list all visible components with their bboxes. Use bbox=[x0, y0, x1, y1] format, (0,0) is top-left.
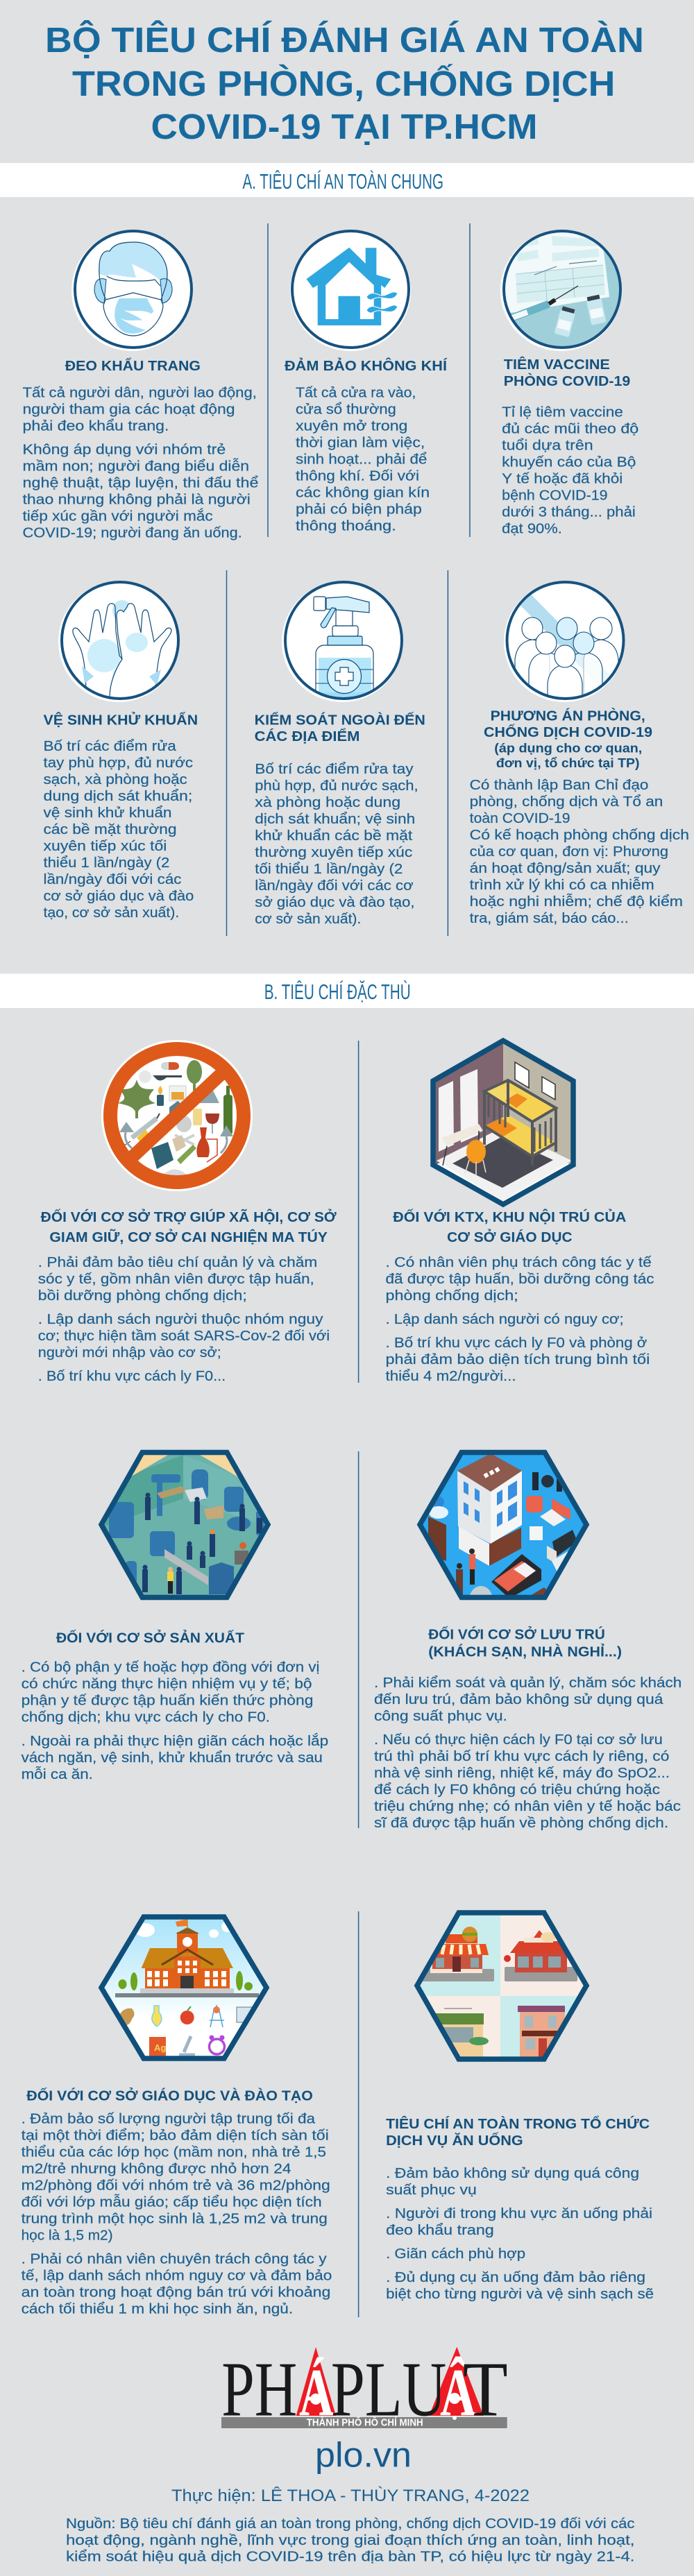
text block: sở giáo dục và đào tạo, bbox=[255, 894, 415, 910]
icon: crowd with strike-through bbox=[504, 581, 625, 702]
heading bbox=[41, 1209, 337, 1245]
text block: . Nếu có thực hiện cách ly F0 tại cơ sở lưu bbox=[374, 1732, 663, 1748]
text block: thường xuyên tiếp xúc bbox=[255, 844, 412, 860]
text block: an toàn trong hoạt động bán trú với khoảng bbox=[22, 2285, 330, 2301]
icon: prohibited substances bbox=[101, 1040, 253, 1191]
text block: sạch, xà phòng hoặc bbox=[43, 771, 187, 787]
heading: ĐỐI VỚI CƠ SỞ LƯU TRÚ bbox=[428, 1626, 605, 1643]
text block: chống dịch; khu vực cách ly cho F0. bbox=[22, 1709, 270, 1725]
text block: tiếp xúc gần với người mắc bbox=[22, 508, 213, 524]
text block: . Có bộ phận y tế hoặc hợp đồng với đơn vị bbox=[22, 1660, 319, 1675]
text block: . Đảm bảo không sử dụng quá công bbox=[386, 2165, 639, 2181]
panel: outsiders bbox=[255, 581, 425, 927]
text block: sĩ đã được tập huấn về phòng chống dịch. bbox=[374, 1815, 668, 1831]
text block: . Đảm bảo số lượng người tập trung tối đa bbox=[22, 2111, 316, 2127]
icon: dormitory room bbox=[430, 1038, 576, 1207]
text block: sinh hoạt... phải để bbox=[296, 451, 427, 468]
title: TRONG PHÒNG, CHỐNG DỊCH bbox=[72, 63, 615, 103]
text block: thiểu 1 lần/ngày (2 bbox=[43, 855, 169, 871]
text block: phòng chống dịch; bbox=[386, 1288, 518, 1304]
panel: education bbox=[22, 1913, 332, 2317]
text block bbox=[38, 1254, 330, 1384]
heading bbox=[484, 707, 652, 770]
text block: khuyến cáo của Bộ bbox=[502, 454, 636, 470]
panel: food service bbox=[386, 1910, 654, 2302]
text block bbox=[470, 777, 689, 926]
heading: KIỂM SOÁT NGOÀI ĐẾN bbox=[255, 713, 425, 728]
heading: TIÊM VACCINE bbox=[504, 356, 610, 373]
panel: mask bbox=[22, 230, 258, 541]
text block: . Phải có nhân viên chuyên trách công tác y bbox=[22, 2251, 327, 2267]
logo: Pháp Luật: T bbox=[463, 2347, 508, 2433]
text block: . Có nhân viên phụ trách công tác y tế bbox=[386, 1254, 652, 1270]
icon: washing hands bbox=[58, 581, 179, 702]
heading: ĐỐI VỚI CƠ SỞ TRỢ GIÚP XÃ HỘI, CƠ SỞ bbox=[41, 1209, 337, 1225]
heading: PHƯƠNG ÁN PHÒNG, bbox=[491, 707, 645, 724]
text block: cơ sở giáo dục và đào bbox=[43, 888, 194, 904]
heading bbox=[428, 1626, 622, 1660]
text block: người tham gia các hoạt động bbox=[22, 401, 235, 418]
text block: nghệ thuật, tập luyện, thi đấu thể bbox=[22, 475, 258, 491]
logo: Pháp Luật: PLU bbox=[331, 2347, 446, 2433]
text block: khử khuẩn các bề mặt bbox=[255, 828, 413, 844]
text block: . Lập danh sách người có nguy cơ; bbox=[386, 1311, 624, 1327]
text block: hoặc nghi nhiễm; chế độ kiểm bbox=[470, 894, 683, 910]
text block: thao nhưng không phải là người bbox=[22, 491, 251, 508]
text block: . Bố trí khu vực cách ly F0... bbox=[38, 1368, 226, 1384]
logo: Pháp Luật: THÀNH PHỐ HỒ CHÍ MINH bbox=[307, 2416, 423, 2429]
text block: án hoạt động/sản xuất; quy bbox=[470, 860, 661, 876]
panel: social support and rehab bbox=[38, 1040, 337, 1384]
text block bbox=[386, 2165, 654, 2302]
text block: dịch sát khuẩn; vệ sinh bbox=[255, 811, 415, 827]
text block: tạo, cơ sở sản xuất). bbox=[43, 905, 179, 921]
text block: tế, lập danh sách nhóm nguy cơ và đảm bảo bbox=[22, 2268, 332, 2284]
text block: Có kế hoạch phòng chống dịch bbox=[470, 827, 689, 843]
text block bbox=[296, 384, 430, 534]
text block: lần/ngày đối với các cơ bbox=[255, 878, 414, 894]
text block: người mới nhập vào cơ sở; bbox=[38, 1345, 221, 1360]
panel: disinfection bbox=[43, 581, 198, 921]
text block: Bố trí các điểm rửa tay bbox=[255, 761, 414, 777]
text block: xuyên mở trong bbox=[296, 418, 407, 434]
text block bbox=[502, 404, 638, 537]
text block: . Ngoài ra phải thực hiện giãn cách hoặc lắp bbox=[22, 1733, 328, 1749]
heading: ĐỐI VỚI CƠ SỞ GIÁO DỤC VÀ ĐÀO TẠO bbox=[26, 2087, 313, 2104]
text block: . Giãn cách phù hợp bbox=[386, 2246, 525, 2262]
text block: đủ các mũi theo độ bbox=[502, 420, 638, 437]
text block: đã được tập huấn, bồi dưỡng công tác bbox=[386, 1271, 654, 1287]
text block: biệt cho từng người và vệ sinh sạch sẽ bbox=[386, 2286, 654, 2302]
panel: manufacturing bbox=[22, 1449, 328, 1782]
heading: GIAM GIỮ, CƠ SỞ CAI NGHIỆN MA TÚY bbox=[49, 1229, 328, 1245]
text block: đeo khẩu trang bbox=[386, 2222, 494, 2238]
text block: Tất cả người dân, người lao động, bbox=[22, 384, 257, 401]
heading: VỆ SINH KHỬ KHUẨN bbox=[43, 712, 198, 728]
text block: tra, giám sát, báo cáo... bbox=[470, 910, 629, 926]
text block: tay phù hợp, đủ nước bbox=[43, 755, 193, 771]
text block bbox=[255, 761, 418, 927]
text block: bệnh COVID-19 bbox=[502, 487, 608, 504]
source note: kiểm soát hiệu quả dịch COVID-19 trên địa bàn TP, có hiệu lực từ ngày 21-4. bbox=[66, 2549, 634, 2564]
heading: PHÒNG COVID-19 bbox=[504, 373, 630, 389]
text block: phải đeo khẩu trang. bbox=[22, 418, 169, 434]
heading bbox=[386, 2115, 650, 2149]
section band A: A. TIÊU CHÍ AN TOÀN CHUNG bbox=[243, 169, 443, 194]
section band B bbox=[0, 974, 694, 1008]
panel: lodging bbox=[374, 1449, 682, 1831]
icon: sanitizer bottle bbox=[282, 581, 403, 708]
text block: cửa sổ thường bbox=[296, 401, 396, 418]
heading: (áp dụng cho cơ quan, bbox=[494, 741, 642, 755]
logo: Pháp Luật: Â bbox=[440, 2356, 476, 2431]
text block: cơ; thực hiện tầm soát SARS-Cov-2 đối với bbox=[38, 1328, 330, 1344]
icon: restaurants bbox=[414, 1910, 591, 2063]
panel: dormitory bbox=[386, 1038, 654, 1384]
text block: xuyên tiếp xúc tối bbox=[43, 838, 167, 854]
panel: prevention plan bbox=[470, 581, 689, 926]
text block: . Lập danh sách người thuộc nhóm nguy bbox=[38, 1311, 323, 1327]
text block: . Đủ dụng cụ ăn uống đảm bảo riêng bbox=[386, 2269, 645, 2285]
text block: thiểu 4 m2/người... bbox=[386, 1368, 516, 1384]
text block: Có thành lập Ban Chỉ đạo bbox=[470, 777, 648, 793]
heading: CƠ SỞ GIÁO DỤC bbox=[447, 1229, 573, 1245]
section band A bbox=[0, 163, 694, 197]
text block: phải có biện pháp bbox=[296, 501, 422, 518]
text block bbox=[374, 1675, 682, 1831]
heading: CHỐNG DỊCH COVID-19 bbox=[484, 724, 652, 740]
panel: air bbox=[285, 230, 448, 534]
text block: các không gian kín bbox=[296, 484, 430, 501]
icon: face with mask bbox=[71, 230, 192, 351]
credit: Thực hiện: LÊ THOA - THÙY TRANG, 4-2022 bbox=[171, 2487, 530, 2505]
text block: các bề mặt thường bbox=[43, 821, 176, 837]
title: COVID-19 TẠI TP.HCM bbox=[151, 107, 537, 146]
icon: school bbox=[97, 1913, 271, 2063]
heading: ĐỐI VỚI CƠ SỞ SẢN XUẤT bbox=[56, 1630, 244, 1646]
text block: tại một thời điểm; bảo đảm diện tích sàn tối bbox=[22, 2128, 329, 2144]
text block: công suất phục vụ. bbox=[374, 1708, 507, 1724]
text block: suất phục vụ bbox=[386, 2182, 477, 2198]
icon: house with airflow bbox=[290, 230, 411, 351]
icon: school: Ag bbox=[154, 2042, 166, 2053]
text block: thông khí. Đối với bbox=[296, 468, 419, 484]
heading: TIÊU CHÍ AN TOÀN TRONG TỔ CHỨC bbox=[386, 2115, 650, 2132]
heading bbox=[255, 713, 425, 744]
heading: đơn vị, tổ chức tại TP) bbox=[496, 756, 640, 770]
text block: xà phòng hoặc dung bbox=[255, 794, 400, 810]
text block: Không áp dụng với nhóm trẻ bbox=[22, 441, 226, 458]
text block: có chức năng thực hiện nhiệm vụ y tế; bộ bbox=[22, 1676, 312, 1691]
text block: Y tế hoặc đã khỏi bbox=[502, 470, 623, 487]
logo: Pháp Luật bbox=[221, 2347, 508, 2433]
text block bbox=[22, 384, 258, 541]
text block: trú thì phải bố trí khu vực cách ly riêng, có bbox=[374, 1748, 669, 1764]
text block bbox=[386, 1254, 654, 1384]
text block: triệu chứng nhẹ; có nhân viên y tế hoặc bác bbox=[374, 1798, 681, 1814]
text block: tối thiểu 1 lần/ngày (2 bbox=[255, 861, 403, 877]
text block: Bố trí các điểm rửa bbox=[43, 738, 176, 754]
text block: bồi dưỡng phòng chống dịch; bbox=[38, 1288, 247, 1304]
text block: vách ngăn, vệ sinh, khử khuẩn trước và sau bbox=[22, 1750, 323, 1766]
text block: COVID-19; người đang ăn uống. bbox=[22, 524, 242, 541]
text block: m2/phòng đối với nhóm trẻ và 36 m2/phòng bbox=[22, 2178, 330, 2194]
panel: vaccine bbox=[500, 229, 638, 537]
text block: đối với lớp mẫu giáo; cấp tiểu học diện tích bbox=[22, 2194, 322, 2210]
logo: Pháp Luật: PH bbox=[221, 2347, 297, 2433]
heading: ĐẢM BẢO KHÔNG KHÍ bbox=[285, 357, 448, 374]
text block: Tất cả cửa ra vào, bbox=[296, 384, 416, 401]
heading: ĐEO KHẨU TRANG bbox=[65, 358, 201, 374]
text block: để cách ly F0 không có triệu chứng hoặc bbox=[374, 1782, 660, 1798]
source note: Nguồn: Bộ tiêu chí đánh giá an toàn trong phòng, chống dịch COVID-19 đối với các bbox=[66, 2516, 634, 2532]
text block: . Người đi trong khu vực ăn uống phải bbox=[386, 2206, 652, 2221]
text block: lần/ngày đối với các bbox=[43, 871, 182, 887]
text block: phận y tế được tập huấn kiến thức phòng bbox=[22, 1693, 313, 1708]
text block: mỗi ca ăn. bbox=[22, 1766, 93, 1782]
logo: Pháp Luật: Á bbox=[299, 2356, 334, 2431]
section band B: B. TIÊU CHÍ ĐẶC THÙ bbox=[264, 980, 411, 1004]
text block: nhà vệ sinh riêng, nhiệt kế, máy đo SpO2... bbox=[374, 1765, 670, 1781]
text block: dưới 3 tháng... phải bbox=[502, 504, 636, 520]
text block: vệ sinh khử khuẩn bbox=[43, 805, 172, 821]
source note: hoạt động, ngành nghề, lĩnh vực trong giai đoạn thích ứng an toàn, linh hoạt, bbox=[66, 2532, 634, 2548]
text block bbox=[43, 738, 194, 921]
text block: thời gian làm việc, bbox=[296, 434, 425, 451]
text block: phòng, chống dịch và Tổ an bbox=[470, 794, 663, 810]
text block: mầm non; người đang biểu diễn bbox=[22, 458, 249, 475]
text block: phù hợp, đủ nước sạch, bbox=[255, 778, 418, 794]
text block bbox=[22, 2111, 332, 2317]
text block: thiểu của các lớp học (mầm non, nhà trẻ 1,5 bbox=[22, 2144, 326, 2160]
text block: thông thoáng. bbox=[296, 518, 396, 534]
text block: trung trình một học sinh là 1,25 m2 và trung bbox=[22, 2211, 328, 2227]
text block: . Phải đảm bảo tiêu chí quản lý và chăm bbox=[38, 1254, 317, 1270]
icon: hotel bbox=[416, 1449, 590, 1604]
text block: dung dịch sát khuẩn; bbox=[43, 788, 192, 804]
text block: phải đảm bảo diện tích trung bình tối bbox=[386, 1351, 650, 1367]
text block: đạt 90%. bbox=[502, 520, 562, 537]
text block: sóc y tế, gồm nhân viên được tập huấn, bbox=[38, 1271, 314, 1287]
text block bbox=[22, 1660, 328, 1782]
text block: trình xử lý khi có ca nhiễm bbox=[470, 877, 654, 893]
text block: cách tối thiểu 1 m khi học sinh ăn, ngủ. bbox=[22, 2301, 293, 2317]
text block: học là 1,5 m2) bbox=[22, 2228, 113, 2244]
text block: tuổi dựa trên bbox=[502, 437, 593, 454]
title: BỘ TIÊU CHÍ ĐÁNH GIÁ AN TOÀN bbox=[45, 19, 644, 60]
icon: vaccine card and vials bbox=[500, 229, 625, 354]
heading: ĐỐI VỚI KTX, KHU NỘI TRÚ CỦA bbox=[393, 1209, 626, 1225]
source note bbox=[66, 2516, 634, 2564]
heading bbox=[393, 1209, 626, 1245]
text block: . Bố trí khu vực cách ly F0 và phòng ở bbox=[386, 1335, 647, 1351]
text block: toàn COVID-19 bbox=[470, 810, 570, 826]
site address: plo.vn bbox=[315, 2436, 412, 2475]
heading: (KHÁCH SẠN, NHÀ NGHỈ...) bbox=[428, 1644, 622, 1660]
text block: của cơ quan, đơn vị: Phương bbox=[470, 844, 668, 860]
heading: DỊCH VỤ ĂN UỐNG bbox=[386, 2132, 523, 2149]
heading: CÁC ĐỊA ĐIỂM bbox=[255, 728, 359, 744]
title bbox=[45, 19, 644, 146]
text block: cơ sở sản xuất). bbox=[255, 911, 361, 927]
heading bbox=[504, 356, 630, 389]
text block: m2/trẻ nhưng không được nhỏ hơn 24 bbox=[22, 2161, 291, 2177]
text block: . Phải kiểm soát và quản lý, chăm sóc khách bbox=[374, 1675, 682, 1691]
icon: factory floor bbox=[97, 1449, 271, 1601]
text block: Tỉ lệ tiêm vaccine bbox=[502, 404, 623, 420]
text block: đến lưu trú, đảm bảo không sử dụng quá bbox=[374, 1691, 663, 1707]
